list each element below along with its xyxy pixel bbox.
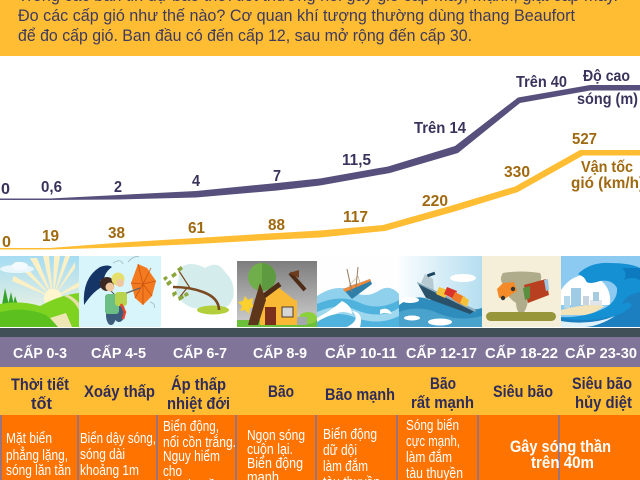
icon: sunny landscape <box>0 256 79 327</box>
wind speed labels: 19 <box>42 228 59 245</box>
dark strip under illustrations <box>0 328 640 337</box>
effect text: level 0-3: sóng lăn tăn <box>6 463 71 479</box>
wind level row: CẤP 8-9 <box>253 345 307 362</box>
effect text: level 4-5: sóng dài <box>80 447 125 463</box>
wave height labels: 11,5 <box>342 152 371 169</box>
effect text: level 0-3 <box>6 431 71 479</box>
storm name row: Bão mạnh <box>325 386 395 404</box>
wind speed labels: 220 <box>422 193 448 210</box>
storm name row: Siêu bão <box>493 383 553 401</box>
wave height labels: Trên 40 <box>516 74 567 91</box>
storm name row: Bão <box>268 383 294 401</box>
effect text: level 8-9 <box>247 428 305 480</box>
wind level row: CẤP 4-5 <box>91 345 146 362</box>
storm name row: rất mạnh <box>411 394 474 412</box>
storm name row: nhiệt đới <box>167 395 230 413</box>
effect text: level 10-11 <box>323 427 380 480</box>
effect text: level 0-3: Mặt biển <box>6 431 52 447</box>
storm name row: Thời tiết <box>11 376 69 394</box>
wind level row: CẤP 6-7 <box>173 345 227 362</box>
effect text: levels 18-30: trên 40m <box>531 453 594 472</box>
storm name row: Xoáy thấp <box>84 383 155 401</box>
storm name row: hủy diệt <box>575 394 632 412</box>
effect text: level 8-9: Biển động <box>247 456 303 472</box>
icon: ship in heavy storm <box>399 256 482 327</box>
storm name row: Áp thấp <box>171 375 226 394</box>
line chart: wind speed <box>0 131 640 251</box>
effect text: level 10-11: Biển động <box>323 427 377 443</box>
wind speed labels: 38 <box>108 225 125 242</box>
effect text: level 0-3: phẳng lặng, <box>6 446 68 464</box>
icon: tornado with car and bus <box>482 256 561 327</box>
wind level row: CẤP 18-22 <box>485 345 558 362</box>
effect text: level 6-7: cho <box>163 464 182 480</box>
effect text: level 4-5: khoảng 1m <box>80 463 139 479</box>
wave height labels: 0 <box>1 181 10 198</box>
wind speed labels: 0 <box>2 234 11 251</box>
wave height labels: 4 <box>192 173 200 190</box>
effect text: levels 18-30: Gây sóng thần <box>510 437 611 456</box>
effect text: level 4-5: Biển dậy sóng, <box>80 431 156 447</box>
effect text: level 12-17 <box>406 418 463 480</box>
effect text: level 6-7: Biển động, <box>163 419 219 435</box>
wind speed labels: 88 <box>268 217 285 234</box>
wind speed labels: Vận tốc <box>581 159 633 176</box>
storm name row <box>0 367 640 415</box>
wind level row: CẤP 10-11 <box>325 345 397 362</box>
icon: house hit by storm <box>237 261 317 327</box>
wind level row: CẤP 0-3 <box>13 345 67 362</box>
wave height labels: 2 <box>114 179 122 196</box>
effect text: level 8-9: Ngọn sóng <box>247 428 305 444</box>
effects row <box>0 415 640 480</box>
wind level row: CẤP 12-17 <box>406 345 477 362</box>
wind speed labels <box>2 131 640 251</box>
intro text: Đo các cấp gió như thế nào? Cơ quan khí tượng thường dùng thang Beaufort <box>18 6 575 25</box>
wind speed labels: 117 <box>343 209 368 226</box>
effect text: level 12-17: cực mạnh, <box>406 434 460 450</box>
effect text: level 6-7: Nguy hiểm <box>163 449 220 465</box>
wave height labels: Độ cao <box>583 68 630 85</box>
wind speed labels: 527 <box>572 131 597 148</box>
line chart: wave height <box>0 68 640 200</box>
icon: tsunami wave and city <box>561 256 640 327</box>
intro banner <box>0 0 640 56</box>
effect text: level 12-17: làm đắm <box>406 449 452 466</box>
wave height labels: 7 <box>273 168 281 185</box>
intro text <box>18 0 618 45</box>
wind level row: CẤP 23-30 <box>565 345 637 362</box>
wind speed labels: 61 <box>188 220 205 237</box>
storm name row: tốt <box>31 395 52 413</box>
effect text: level 4-5 <box>80 431 156 479</box>
effect text: level 10-11: dữ dội <box>323 443 357 459</box>
icon: boat on waves <box>317 267 399 327</box>
wind level row <box>0 337 640 367</box>
effect text: level 10-11: làm đắm <box>323 458 368 475</box>
wave height labels: 0,6 <box>41 179 62 196</box>
storm name row: Siêu bão <box>572 375 632 393</box>
effect text: level 8-9: cuộn lại. <box>247 442 293 458</box>
icon: tree bending in wind <box>161 256 237 327</box>
effect text: level 12-17: Sóng biển <box>406 418 459 434</box>
effect text: levels 18-30 <box>510 437 611 472</box>
effect text: level 6-7: nổi cồn trắng. <box>163 434 236 451</box>
effect text: level 6-7 <box>163 419 236 480</box>
icon: kids with umbrellas <box>79 256 161 327</box>
wind speed labels: 330 <box>504 164 530 181</box>
storm name row: Bão <box>430 375 456 393</box>
wave height labels: Trên 14 <box>414 120 466 137</box>
intro text: để đo cấp gió. Ban đầu có đến cấp 12, sau mở rộng đến cấp 30. <box>18 26 472 45</box>
wave height labels <box>1 68 638 198</box>
